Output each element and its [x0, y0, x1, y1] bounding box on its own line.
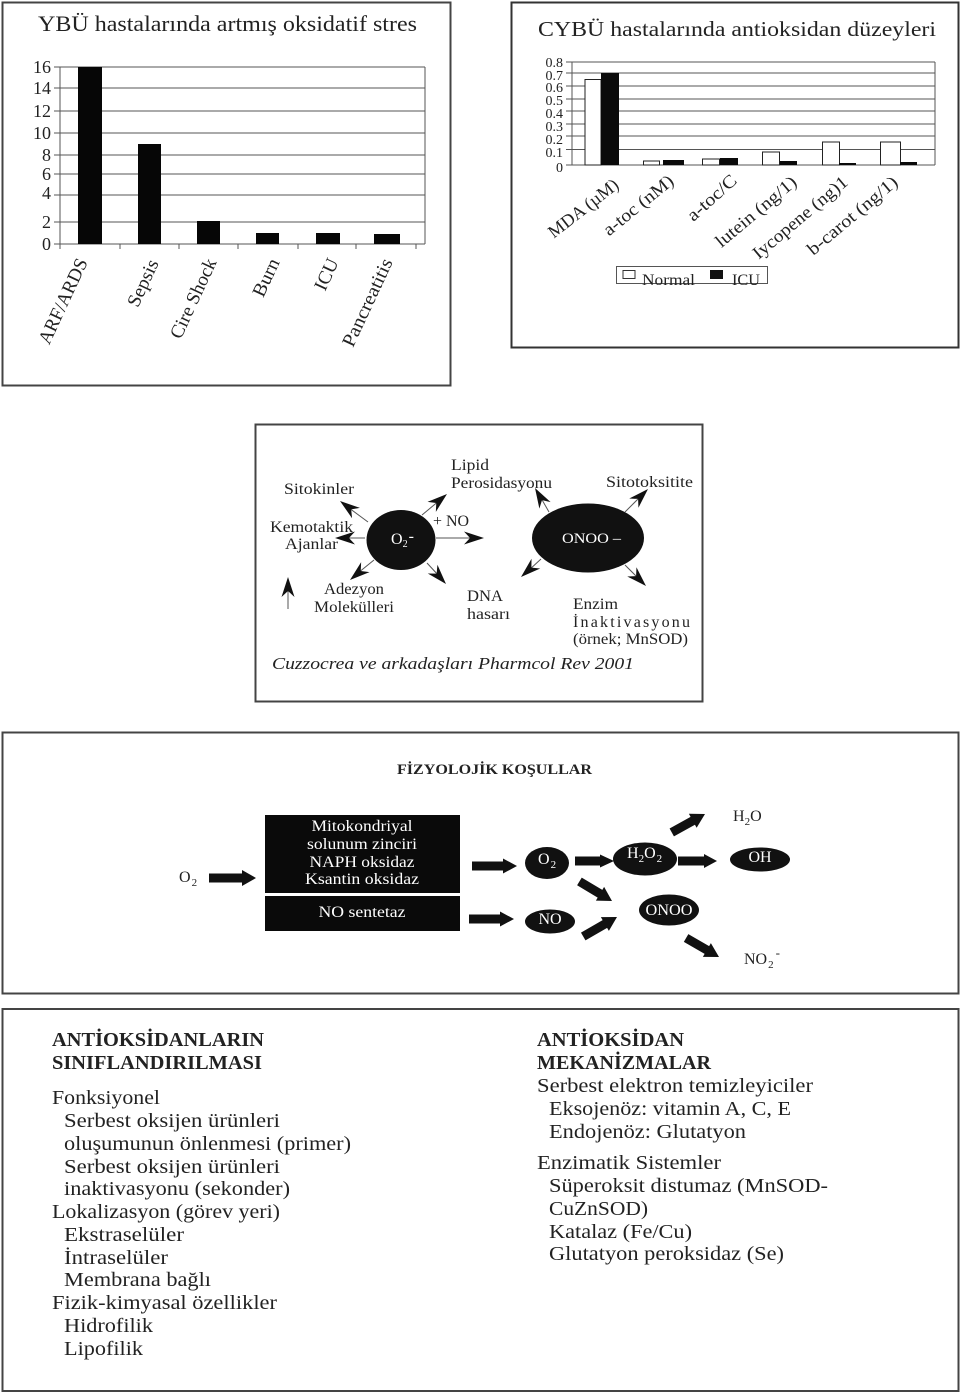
label: H2O: H [733, 808, 745, 825]
panel: superoxide and peroxynitrite effects [256, 424, 702, 702]
text block: classification [52, 1027, 351, 1360]
y axis labels: 0.7 [546, 69, 563, 84]
labels: effects: Ajanlar [285, 536, 339, 553]
label: NO2: NO [744, 951, 767, 968]
label: H2O: 2 [745, 816, 750, 828]
text block: mechanisms: CuZnSOD) [549, 1198, 648, 1220]
y axis labels: 16 [33, 57, 51, 77]
x axis labels: lutein (ng/1) [711, 172, 801, 252]
text block: classification: Serbest oksijen ürünleri [64, 1156, 280, 1178]
y axis labels: 0.4 [546, 107, 563, 122]
arrow: to chemotactic agents [335, 532, 365, 544]
node: NO: NO [538, 911, 562, 928]
arrow: H2O2 to OH [678, 854, 717, 868]
y axis labels: 2 [42, 212, 51, 232]
box: NO synthase: NO sentetaz [318, 904, 406, 921]
text block: classification: Fonksiyonel [52, 1087, 160, 1109]
arrow: H2O2 to H2O [668, 807, 709, 839]
x axis labels: ICU [311, 255, 344, 294]
text block: classification: Lokalizasyon (görev yeri) [52, 1201, 280, 1223]
node: O2: O [538, 851, 550, 868]
node: O2: 2 [551, 859, 556, 871]
box: oxidase sources: NAPH oksidaz [310, 854, 414, 871]
box: oxidase sources: solunum zinciri [307, 836, 418, 853]
arrow: O2 to ONOO [575, 875, 616, 908]
O2 node: - [409, 528, 414, 545]
box: oxidase sources [265, 815, 460, 893]
arrow: to enzyme inactivation [625, 565, 651, 591]
box: oxidase sources: Ksantin oksidaz [305, 871, 419, 888]
arrow: O2 lower right [427, 563, 451, 588]
y axis labels: 0.8 [546, 56, 563, 71]
panel: antioxidant levels chart [512, 2, 958, 348]
node: H2O2 [613, 842, 677, 876]
normal bars [585, 80, 900, 165]
node: ONOO [639, 894, 699, 926]
node: H2O2: O [644, 845, 656, 862]
text block: mechanisms: Endojenöz: Glutatyon [549, 1121, 746, 1143]
text block: classification: Membrana bağlı [64, 1269, 211, 1291]
arrow: plus NO [436, 532, 484, 544]
node: H2O2: H [627, 845, 639, 862]
arrow: ONOO to NO2 [682, 931, 723, 964]
panel: physiological conditions [2, 732, 958, 994]
node: OH: OH [748, 849, 772, 866]
labels: effects: DNA [467, 588, 503, 605]
labels: effects: Sitokinler [284, 481, 355, 498]
y axis labels: 0.6 [546, 81, 563, 96]
heading: antioxidant levels: CYBÜ hastalarında antioksidan düzeyleri [538, 17, 936, 41]
x axis labels: Pancreatitis [338, 255, 398, 350]
arrow: to lipid peroxidation [422, 489, 451, 515]
y axis labels: 0.2 [546, 133, 563, 148]
y axis labels: 0.1 [546, 146, 563, 161]
text block: mechanisms: Enzimatik Sistemler [537, 1152, 721, 1174]
O2 node [366, 510, 436, 570]
labels: effects: Perosidasyonu [451, 475, 552, 492]
y axis labels: 0.3 [546, 120, 563, 135]
y axis labels: 12 [33, 101, 51, 121]
text block: mechanisms: MEKANİZMALAR [537, 1050, 712, 1074]
text block: classification: İntraselüler [64, 1246, 168, 1269]
label: NO2: - [776, 945, 780, 960]
text block: classification: Lipofilik [64, 1338, 143, 1360]
text block: classification: Serbest oksijen ürünleri [64, 1110, 280, 1132]
text block: classification: SINIFLANDIRILMASI [52, 1052, 262, 1074]
arrow: increase indicator [282, 577, 294, 609]
x axis labels [35, 255, 398, 350]
y axis labels: 0 [42, 234, 51, 254]
heading: oxidative stress: YBÜ hastalarında artmış oksidatif stres [38, 11, 417, 36]
x axis labels: MDA (µM) [544, 174, 623, 243]
arrow: oxidases to O2 [472, 858, 517, 874]
text block: mechanisms: Eksojenöz: vitamin A, C, E [549, 1098, 791, 1120]
node: H2O2: 2 [639, 853, 644, 865]
label: H2O: O [750, 808, 762, 825]
text block: classification: inaktivasyonu (sekonder) [64, 1178, 290, 1200]
text block: mechanisms: Glutatyon peroksidaz (Se) [549, 1243, 784, 1265]
label: O2 input: 2 [192, 877, 197, 889]
labels: effects: Lipid [451, 457, 489, 474]
y axis labels: 10 [33, 123, 51, 143]
labels: effects [270, 457, 693, 648]
text block: classification: ANTİOKSİDANLARIN [52, 1027, 265, 1051]
node: OH [730, 848, 790, 872]
legend: Normal [642, 272, 696, 289]
text block: mechanisms: ANTİOKSİDAN [537, 1027, 685, 1051]
arrow: to cytotoxicity [625, 484, 653, 512]
arrow: to DNA damage [517, 559, 541, 582]
text block: mechanisms: Süperoksit distumaz (MnSOD- [549, 1175, 828, 1197]
arrow: NO synthase to NO [469, 912, 514, 926]
labels: effects: Sitotoksitite [606, 474, 693, 491]
text block: mechanisms: Katalaz (Fe/Cu) [549, 1221, 692, 1243]
ONOO node: ONOO – [562, 531, 622, 547]
label: NO2: 2 [768, 959, 774, 971]
arrow: to cytokines [336, 496, 368, 522]
bar series [78, 67, 400, 244]
box: oxidase sources: Mitokondriyal [312, 818, 413, 835]
x axis labels: Cire Shock [166, 255, 222, 342]
labels: effects: (örnek; MnSOD) [573, 631, 688, 648]
x axis labels: a-toc (nM) [599, 171, 678, 240]
text block: mechanisms: Serbest elektron temizleyiciler [537, 1075, 813, 1097]
x axis labels: b-carot (ng/1) [803, 172, 902, 260]
heading: physiological conditions: FİZYOLOJİK KOŞULLAR [397, 761, 592, 778]
x axis labels: Burn [249, 255, 285, 300]
box: NO synthase [265, 896, 460, 931]
O2 node: 2 [403, 539, 408, 550]
panel: antioxidant classification and mechanisms [2, 1009, 958, 1391]
x axis labels [544, 170, 902, 264]
arrow: O2 to H2O2 [575, 854, 614, 868]
y axis labels: 0 [556, 161, 563, 176]
panel: oxidative stress chart [2, 2, 450, 386]
ICU bars [601, 73, 917, 165]
labels: effects: İnaktivasyonu [573, 613, 690, 631]
arrow: to adhesion molecules [346, 560, 374, 585]
x axis labels: a-toc/C [683, 170, 741, 225]
labels: effects: Adezyon [324, 581, 384, 598]
arrow: ONOO upper left [529, 485, 551, 512]
label: O2 input: O [179, 869, 191, 886]
text block: mechanisms [537, 1027, 828, 1265]
node: ONOO: ONOO [646, 902, 692, 919]
x axis labels: Iycopene (ng)1 [748, 172, 852, 264]
y axis labels: 6 [42, 164, 51, 184]
labels: effects: + NO [433, 513, 469, 530]
labels: effects: Kemotaktik [270, 519, 353, 536]
legend [616, 266, 768, 289]
y axis labels: 0.5 [546, 94, 563, 109]
text block: classification: Fizik-kimyasal özellikler [52, 1292, 277, 1314]
y axis labels [546, 56, 563, 176]
text block: classification: Ekstraselüler [64, 1224, 184, 1246]
arrow: O2 to enzymes [209, 870, 256, 886]
y axis labels: 14 [33, 78, 51, 98]
labels: effects: hasarı [467, 606, 511, 623]
text block: classification: Hidrofilik [64, 1315, 153, 1337]
x axis labels: Sepsis [123, 256, 164, 310]
labels: effects: Enzim [573, 596, 619, 613]
citation: Cuzzocrea ve arkadaşları Pharmcol Rev 2001 [272, 654, 634, 673]
text block: classification: oluşumunun önlenmesi (primer) [64, 1133, 351, 1155]
O2 node: O [391, 531, 403, 548]
x axis labels: ARF/ARDS [35, 255, 93, 347]
y axis labels [33, 57, 51, 254]
labels: effects: Molekülleri [314, 599, 395, 616]
arrow: NO to ONOO [579, 910, 621, 943]
y axis labels: 4 [42, 183, 51, 203]
node: NO [525, 910, 575, 934]
node: H2O2: 2 [657, 853, 662, 865]
ONOO node [532, 504, 644, 572]
y axis labels: 8 [42, 145, 51, 165]
node: O2 [525, 847, 569, 879]
legend: ICU [732, 272, 760, 289]
